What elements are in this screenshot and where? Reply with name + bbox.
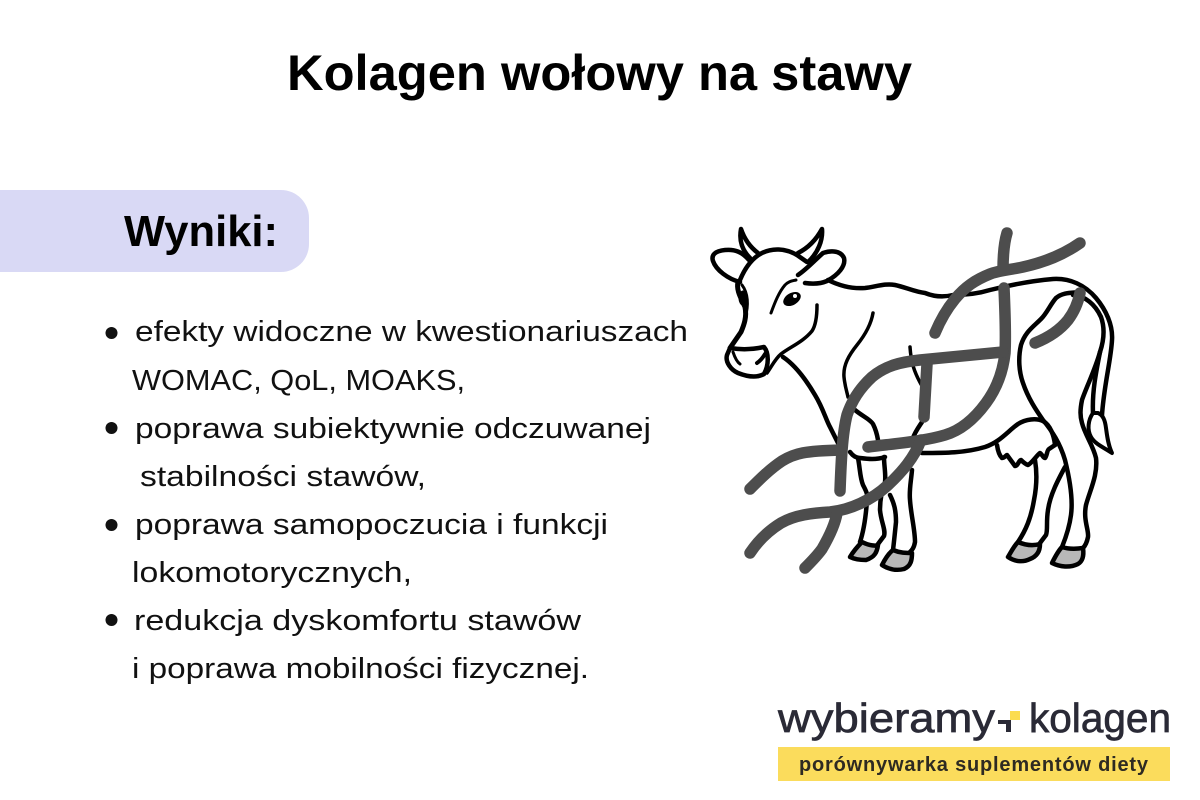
bullet item 2 — [106, 413, 651, 493]
heading: results: Wyniki: — [124, 207, 278, 256]
bullet item 4: i poprawa mobilności fizycznej. — [132, 653, 589, 685]
cow hip and hind leg — [1019, 292, 1080, 547]
cow tail tuft — [1089, 413, 1112, 453]
bullet item 3: poprawa samopoczucia i funkcji — [135, 509, 608, 541]
bullet item 1 — [106, 316, 688, 397]
icon: collagen helix — [750, 233, 1080, 568]
cow front body and legs — [783, 357, 838, 443]
logo tagline: porównywarka suplementów diety — [799, 754, 1149, 776]
cow back and rump — [828, 279, 1112, 415]
icon: cow outline — [712, 229, 1112, 570]
bullet item 1: efekty widoczne w kwestionariuszach — [135, 316, 688, 348]
helix upper strand — [935, 243, 1080, 333]
cow belly and udder — [922, 419, 1055, 453]
helix branch — [805, 513, 837, 568]
bullet item 4 — [106, 605, 589, 685]
title: Kolagen wołowy na stawy — [287, 45, 912, 101]
helix rung stub — [924, 364, 927, 417]
helix main strand — [868, 288, 1005, 447]
logo mark — [998, 711, 1020, 732]
cow hooves — [850, 542, 1083, 570]
helix left strand — [750, 450, 841, 489]
helix lower strand — [750, 440, 921, 553]
panel: results heading — [0, 190, 309, 272]
logo — [777, 695, 1171, 781]
helix rump strand — [1035, 293, 1080, 343]
bullet item 2: stabilności stawów, — [140, 461, 426, 493]
bullet item 3: lokomotorycznych, — [132, 557, 412, 589]
logo wordmark left: wybieramy — [777, 695, 996, 741]
logo tagline bar — [778, 747, 1170, 781]
cow hind legs — [1018, 460, 1036, 542]
bullet item 2: poprawa subiektywnie odczuwanej — [135, 413, 651, 445]
bullet item 3 — [106, 509, 608, 589]
illustration: cow with collagen helix — [712, 229, 1112, 570]
cow head — [712, 250, 749, 282]
bullet item 1: WOMAC, QoL, MOAKS, — [132, 365, 465, 397]
logo wordmark right: kolagen — [1029, 695, 1171, 741]
bullet item 4: redukcja dyskomfortu stawów — [134, 605, 582, 637]
helix top stub — [1003, 233, 1007, 270]
results bullet list — [106, 316, 688, 685]
cow eyes — [781, 290, 803, 308]
helix rung top — [840, 352, 1003, 491]
